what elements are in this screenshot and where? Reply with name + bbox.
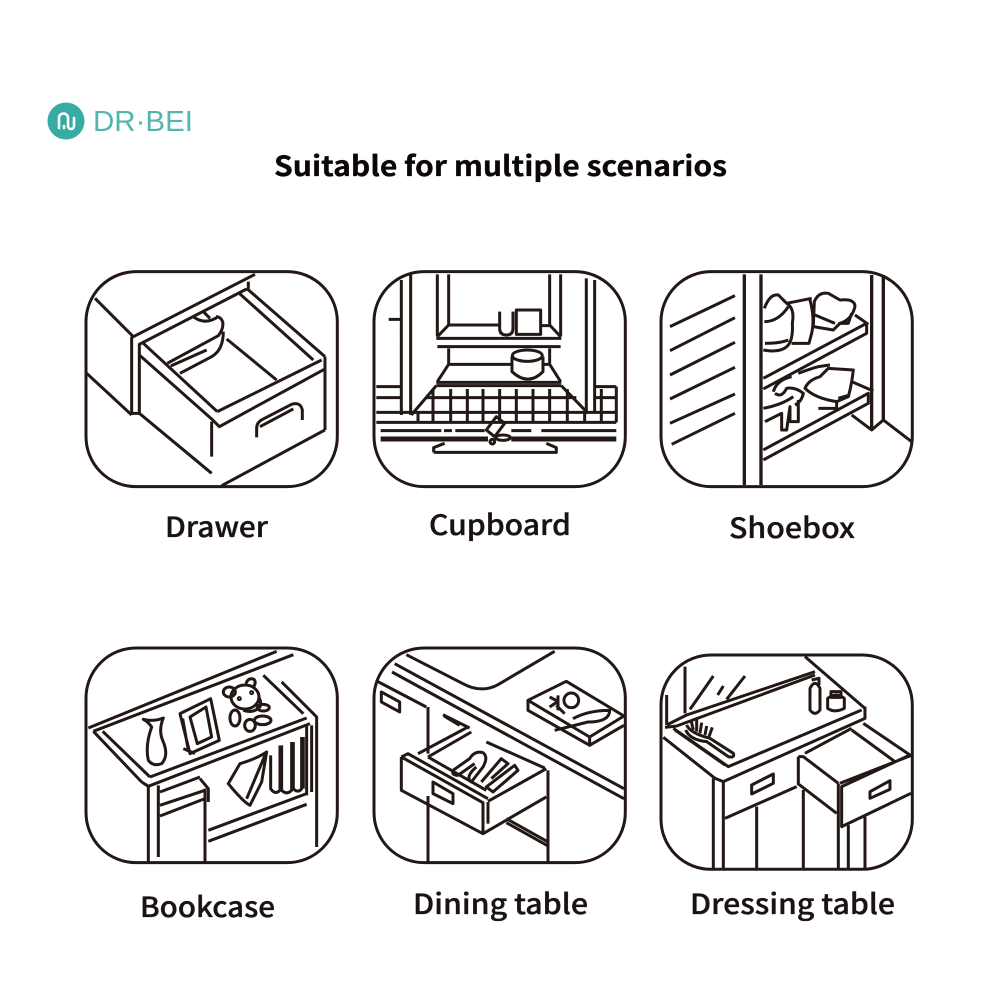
logo: DR·BEI: DR·BEI xyxy=(93,106,193,138)
label: Drawer: Drawer xyxy=(165,506,269,546)
label: Dining table: Dining table xyxy=(413,883,588,923)
label: Bookcase: Bookcase xyxy=(140,886,275,926)
panel: shoebox icon xyxy=(661,272,912,487)
teddy bear xyxy=(231,685,259,709)
cutlery xyxy=(453,752,486,782)
picture frame xyxy=(180,699,219,754)
panel: bookcase icon xyxy=(86,648,337,863)
brush xyxy=(686,725,734,757)
logo: DR·BEI xyxy=(48,102,193,140)
panel: cupboard icon xyxy=(374,272,625,487)
panel: drawer icon xyxy=(86,272,337,487)
shoes top row xyxy=(763,295,813,351)
title: Suitable for multiple scenarios xyxy=(274,145,727,185)
label: Cupboard: Cupboard xyxy=(429,504,571,544)
vase xyxy=(143,718,166,765)
label: Dressing table: Dressing table xyxy=(690,883,895,923)
label: Shoebox: Shoebox xyxy=(729,507,855,547)
bottles xyxy=(810,678,820,713)
shoes bottom row xyxy=(763,365,830,430)
panel: dressing table icon xyxy=(661,655,912,869)
panel: dining table icon xyxy=(374,648,625,863)
cutting board xyxy=(528,681,624,745)
